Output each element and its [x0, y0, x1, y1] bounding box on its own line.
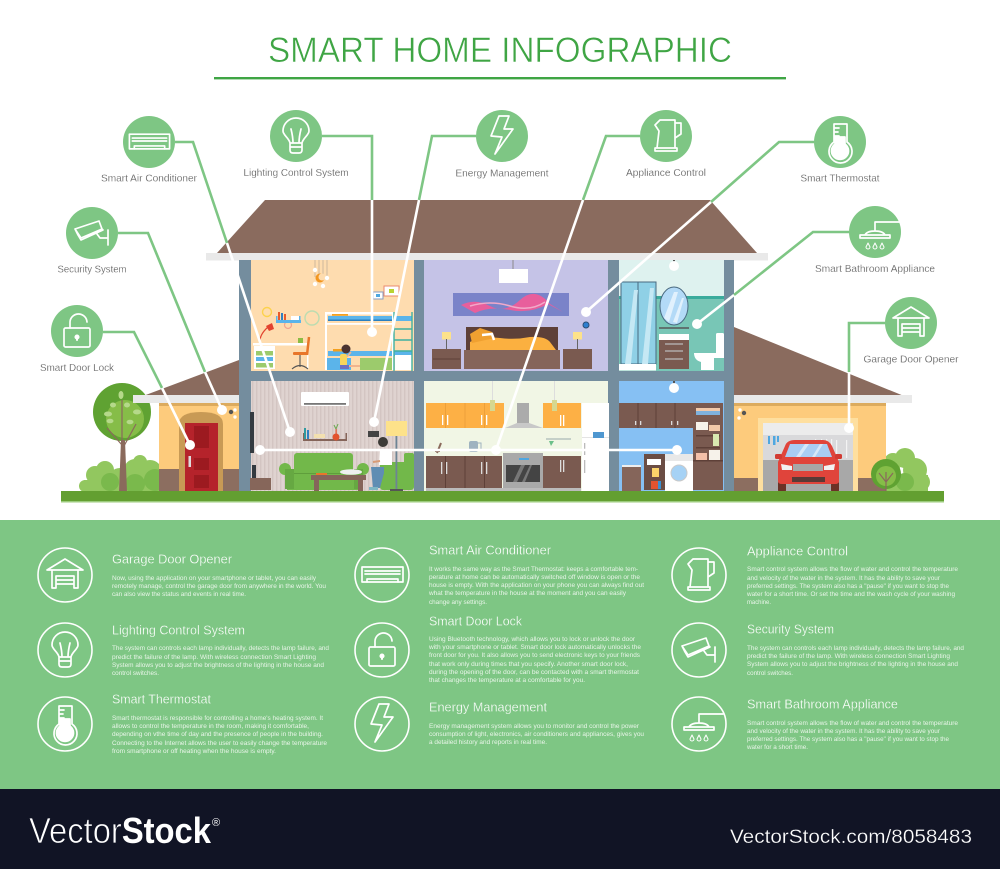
item: energy management: a detailed history and reports in real time. — [429, 740, 547, 746]
desk chair — [292, 337, 309, 369]
house walls — [239, 260, 734, 492]
item: security system: predict the failure of the lamp. With wireless connection Smart Lighting — [747, 654, 950, 660]
bed — [464, 327, 560, 369]
upper cabinets — [619, 403, 693, 428]
item: lighting control system: predict the failure of the lamp. With wireless connection Smart Lighting — [112, 655, 316, 661]
pendant lamps — [490, 381, 557, 411]
item: garage door opener: Now, using the application on your smartphone or tablet, you can easily — [112, 576, 316, 582]
item: smart door lock: Using Bluetooth technology, which allows you to lock or unlock the door — [429, 637, 635, 643]
cooker hood — [505, 403, 543, 428]
ceiling lamp — [499, 260, 528, 283]
callout: garage door opener — [844, 297, 959, 433]
right wing roof — [734, 327, 904, 396]
callout: appliance control — [255, 110, 706, 455]
item: garage door opener: can also view the status and events in real time. — [112, 592, 246, 598]
item: lighting control system: control switches. — [112, 671, 159, 677]
callout: lighting control system — [244, 110, 377, 337]
wall thermostat — [368, 431, 379, 437]
desk — [253, 323, 308, 369]
callout: lighting control system: Lighting Control System — [244, 168, 348, 179]
item: security system: control switches. — [747, 671, 793, 677]
item: energy management — [355, 697, 644, 751]
callout: smart door lock: Smart Door Lock — [40, 363, 115, 374]
room: kitchen — [424, 381, 609, 492]
item: smart door lock: that changes the temperature at a comfortable for you. — [429, 678, 585, 684]
armchair — [380, 453, 414, 490]
callout: smart thermostat — [581, 116, 880, 317]
TV — [250, 412, 254, 453]
item: smart bathroom appliance — [672, 696, 959, 751]
ground — [61, 491, 944, 502]
footer bar — [0, 789, 1000, 869]
callout: garage door opener: Garage Door Opener — [864, 354, 959, 366]
item: garage door opener: remotely manage, control the garage door from anywhere in the world. You — [112, 584, 326, 590]
item: garage door opener — [38, 548, 326, 602]
shower cabin — [619, 282, 656, 370]
callout: appliance control: Appliance Control — [626, 168, 706, 179]
item: smart air conditioner: Smart Air Conditioner — [429, 542, 552, 558]
front door — [179, 412, 223, 492]
item: appliance control: water for a short time. Or set the time and the wash cycle of your washing — [746, 592, 955, 598]
item: smart thermostat: depending on vthe time of day and the presence of people in the building. — [112, 732, 323, 738]
vanity — [659, 327, 689, 369]
item: smart bathroom appliance: Smart control system allows the flow of water and control the temperature — [747, 721, 959, 727]
item: smart bathroom appliance: Smart Bathroom Appliance — [747, 696, 898, 712]
mirror — [660, 287, 688, 325]
item: smart door lock: with your smartphone or tablet. Smart door lock automatically unlocks the — [428, 645, 642, 651]
item: energy management: Energy Management — [429, 700, 547, 714]
right bushes — [884, 448, 930, 492]
painting — [453, 293, 569, 316]
nightstands with lamps — [432, 332, 592, 369]
security cameras — [229, 408, 746, 420]
item: smart thermostat: from smartphone or off heating when the house is empty. — [112, 749, 276, 755]
title underline — [214, 77, 786, 79]
item: smart air conditioner: change any settings. — [429, 600, 487, 606]
item: smart air conditioner: house is empty. With the application on your phone you can always find out — [429, 583, 644, 589]
callout: security system: Security System — [58, 264, 126, 276]
small round tree — [871, 459, 901, 491]
lower cabinets — [426, 456, 581, 491]
callout: energy management — [369, 110, 549, 427]
house illustration — [61, 200, 944, 502]
item: smart thermostat: allows to control the temperature in the room, making it comfortable, — [112, 724, 309, 730]
item: appliance control: preferred settings. The system also has a "pause" if you want to stop the — [747, 584, 950, 590]
item: smart bathroom appliance: water for a short time. — [746, 745, 808, 751]
item: smart air conditioner: It works the same way as the Smart Thermostat: keeps a comfortable tem- — [429, 567, 638, 573]
callout: smart air conditioner: Smart Air Conditioner — [101, 174, 198, 184]
footer logo: VectorStock — [29, 810, 212, 851]
item: lighting control system: System allows you to adjust the brightness of the lighting in the house and — [112, 663, 324, 669]
wall air conditioner — [301, 392, 349, 406]
bunk bed — [325, 312, 412, 371]
small shelf — [644, 454, 665, 490]
item: smart air conditioner — [355, 542, 644, 606]
item: smart door lock: during the opening of the door, can be contacted with a smart thermostat — [429, 670, 639, 676]
main roof — [217, 200, 757, 253]
item: appliance control: and velocity of the water in the system. It has the ability to save your — [747, 576, 940, 582]
registered mark: ® — [212, 817, 220, 829]
callout: smart air conditioner — [101, 116, 295, 437]
ceiling light — [669, 260, 679, 271]
item: smart thermostat: Smart Thermostat — [112, 692, 211, 706]
callout: smart door lock — [40, 305, 195, 450]
callout: smart bathroom appliance: Smart Bathroom Appliance — [815, 264, 935, 275]
item: appliance control: Appliance Control — [747, 544, 848, 558]
item: security system: The system can controls each lamp individually, detects the lamp failure, and — [747, 646, 964, 652]
item: energy management: Energy management system allows you to monitor and control the power — [429, 724, 639, 730]
toilet — [694, 333, 724, 370]
item: energy management: consumption of light, electronics, air conditioners and appliances, gives you — [429, 732, 644, 738]
item: garage door opener: Garage Door Opener — [112, 552, 233, 566]
item: security system: System allows you to adjust the brightness of the lighting in the house and — [747, 662, 958, 668]
item: security system — [672, 622, 964, 677]
oven — [503, 453, 543, 488]
item: lighting control system: The system can controls each lamp individually, detects the lamp failure, and — [112, 646, 329, 652]
item: smart thermostat: Connecting to the Internet allows the user to easily change the temperature — [112, 741, 328, 747]
item: appliance control: machine. — [747, 600, 771, 606]
left wing wall — [159, 403, 239, 469]
girl — [340, 344, 360, 369]
item: smart door lock: that work only during times that you specify. Another smart door lock, — [429, 662, 628, 668]
room: laundry — [619, 381, 724, 492]
item: smart door lock — [355, 614, 642, 684]
callout: energy management: Energy Management — [456, 168, 549, 180]
left tree — [93, 383, 151, 492]
footer id: VectorStock.com/8058483 — [730, 827, 972, 848]
room: living room — [250, 381, 414, 492]
item: smart thermostat — [38, 692, 328, 755]
item: smart air conditioner: perature at home can be automatically switched off window is open or the — [429, 575, 641, 581]
title: SMART HOME INFOGRAPHIC — [268, 31, 732, 70]
right wing wall — [734, 403, 886, 478]
laundry bin — [622, 465, 641, 491]
TV stand — [250, 465, 271, 490]
sofa — [279, 453, 369, 490]
item: appliance control: Smart control system allows the flow of water and control the temperature — [747, 567, 959, 573]
item: smart air conditioner: what the temperature in the house at the moment and you can easily — [428, 591, 626, 597]
wall sensor — [583, 322, 589, 328]
fridge — [582, 403, 609, 491]
item: smart bathroom appliance: and velocity of the water in the system. It has the ability to save your — [747, 729, 940, 735]
right wing eave — [734, 395, 912, 403]
item: appliance control — [672, 544, 959, 606]
left bushes — [79, 455, 166, 494]
room: master bedroom — [424, 260, 608, 371]
upper cabinets — [426, 403, 581, 428]
callout: security system — [58, 207, 227, 415]
callout: smart bathroom appliance — [692, 206, 935, 329]
item: smart bathroom appliance: preferred settings. The system also has a "pause" if you want to stop the — [747, 737, 950, 743]
garage — [758, 418, 858, 492]
room: bathroom — [619, 260, 724, 371]
item: smart door lock: Smart Door Lock — [429, 614, 522, 628]
left wing roof — [143, 360, 239, 396]
red car — [775, 440, 842, 492]
room: kids bedroom — [251, 260, 414, 371]
washing machine — [665, 454, 693, 491]
panel: descriptions — [0, 520, 1000, 789]
item: smart door lock: front door for you. It also allows you to send electronic keys to your friends — [429, 653, 640, 659]
person reading — [369, 437, 392, 490]
picture frames — [373, 286, 399, 299]
callout: smart thermostat: Smart Thermostat — [800, 174, 880, 184]
item: security system: Security System — [747, 622, 834, 636]
coffee table — [311, 469, 366, 491]
star mobile — [313, 260, 329, 288]
kettle and utensils — [435, 439, 571, 453]
item: lighting control system: Lighting Control System — [112, 622, 245, 638]
ceiling light — [669, 381, 679, 393]
left wing eave — [133, 395, 239, 403]
main eave — [206, 253, 768, 260]
item: smart thermostat: Smart thermostat is responsible for controlling a home's heating system. It — [112, 716, 323, 722]
tall cabinet — [693, 403, 723, 490]
wall decor and shelf — [262, 308, 319, 328]
floor lamp — [386, 421, 407, 491]
item: lighting control system — [38, 622, 329, 677]
wall shelf — [303, 424, 347, 441]
